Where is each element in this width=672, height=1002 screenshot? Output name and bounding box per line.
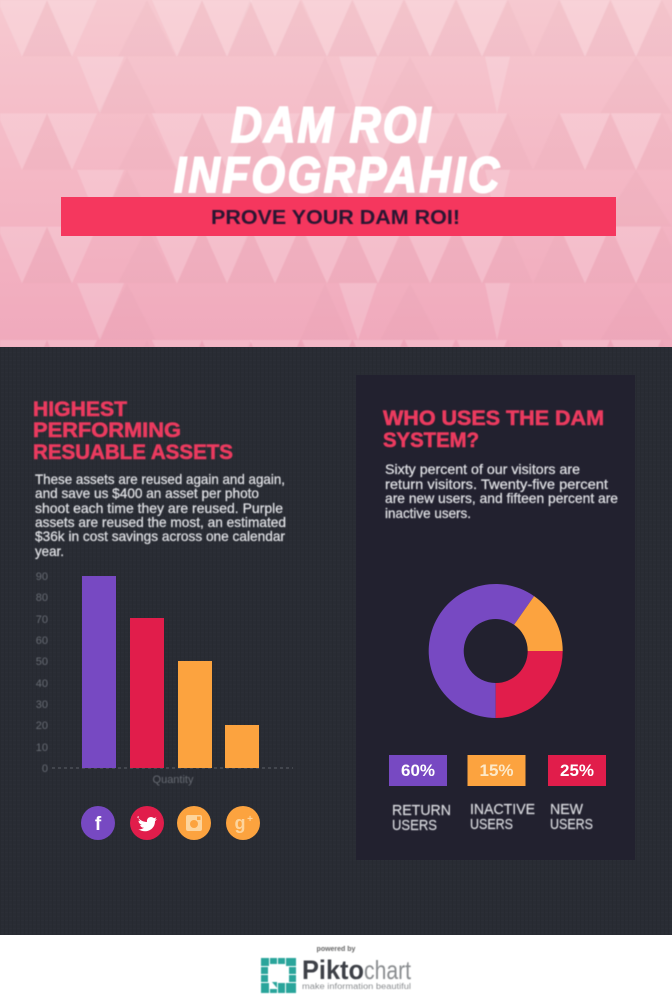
legend: inactive users: 15% [479,761,514,780]
legend: new users: USERS [550,816,593,833]
text block: assets description: and save us $400 an asset per photo [35,485,259,501]
y axis labels: 50 [36,656,48,668]
text block: users description: Sixty percent of our visitors are [385,461,580,477]
y axis labels: 90 [36,571,48,583]
header background [0,0,672,347]
panel: highest performing assets heading: RESUABLE ASSETS [33,441,233,464]
legend: new users: NEW [550,801,584,818]
dark content background [0,347,672,935]
subtitle banner: PROVE YOUR DAM ROI! [211,207,460,229]
legend: return users: USERS [392,817,437,834]
y axis labels: 80 [36,592,48,604]
legend: new users [548,755,606,833]
icon: facebook [81,806,115,840]
legend: inactive users: INACTIVE [470,801,535,818]
text block: assets description: assets are reused the most, an estimated [35,514,286,530]
wordmark [302,955,412,991]
y axis labels: 20 [36,720,48,732]
icon: facebook: f [95,814,102,835]
legend: inactive users [468,755,535,833]
y axis labels: 70 [36,614,48,626]
icon: piktochart logo [261,958,296,993]
text block: assets description [35,471,286,559]
panel: highest performing assets heading: HIGHEST [33,398,127,421]
legend: return users: RETURN [392,802,451,819]
icon: twitter [130,806,164,840]
heading: who uses: SYSTEM? [383,429,479,452]
y axis labels: 0 [42,763,48,775]
text block: assets description: $36k in cost savings across one calendar [35,528,285,544]
legend: inactive users: USERS [470,816,513,833]
x axis label: Quantity [153,774,194,786]
text block: assets description: shoot each time they are reused. Purple [35,500,283,516]
legend: return users: 60% [401,761,435,780]
y axis labels: 30 [36,699,48,711]
panel: highest performing assets heading: PERFORMING [33,419,181,442]
wordmark: Pikto [302,955,364,985]
title [174,97,500,203]
panel: who uses the DAM system [356,375,635,860]
powered by: powered by [317,946,356,953]
icon: google plus [226,806,260,840]
text block: users description: inactive users. [385,505,471,521]
panel: highest performing assets heading [33,398,233,464]
bar chart [36,571,293,786]
title: INFOGRPAHIC [174,147,500,203]
social icons [81,806,260,840]
wordmark: chart [364,955,412,985]
bars [82,576,259,768]
icon: google plus: + [247,814,253,825]
footer [0,935,672,1002]
title: DAM ROI [231,97,431,153]
text block: users description: return visitors. Twenty-five percent [385,476,608,492]
heading: who uses [383,407,604,452]
icon: instagram [177,806,211,840]
wordmark: make information beautiful [302,982,411,991]
y axis labels: 10 [36,742,48,754]
text block: users description: are new users, and fifteen percent are [385,490,618,506]
y axis labels: 60 [36,635,48,647]
legend: new users: 25% [560,761,594,780]
text block: assets description: These assets are reused again and again, [35,471,285,487]
donut chart [429,584,563,718]
y axis labels [36,571,48,775]
text block: assets description: year. [35,543,64,559]
y axis labels: 40 [36,678,48,690]
legend: return users [389,755,451,834]
subtitle banner [61,197,616,236]
icon: google plus: g [234,813,246,833]
text block: users description [385,461,618,521]
heading: who uses: WHO USES THE DAM [383,407,604,430]
